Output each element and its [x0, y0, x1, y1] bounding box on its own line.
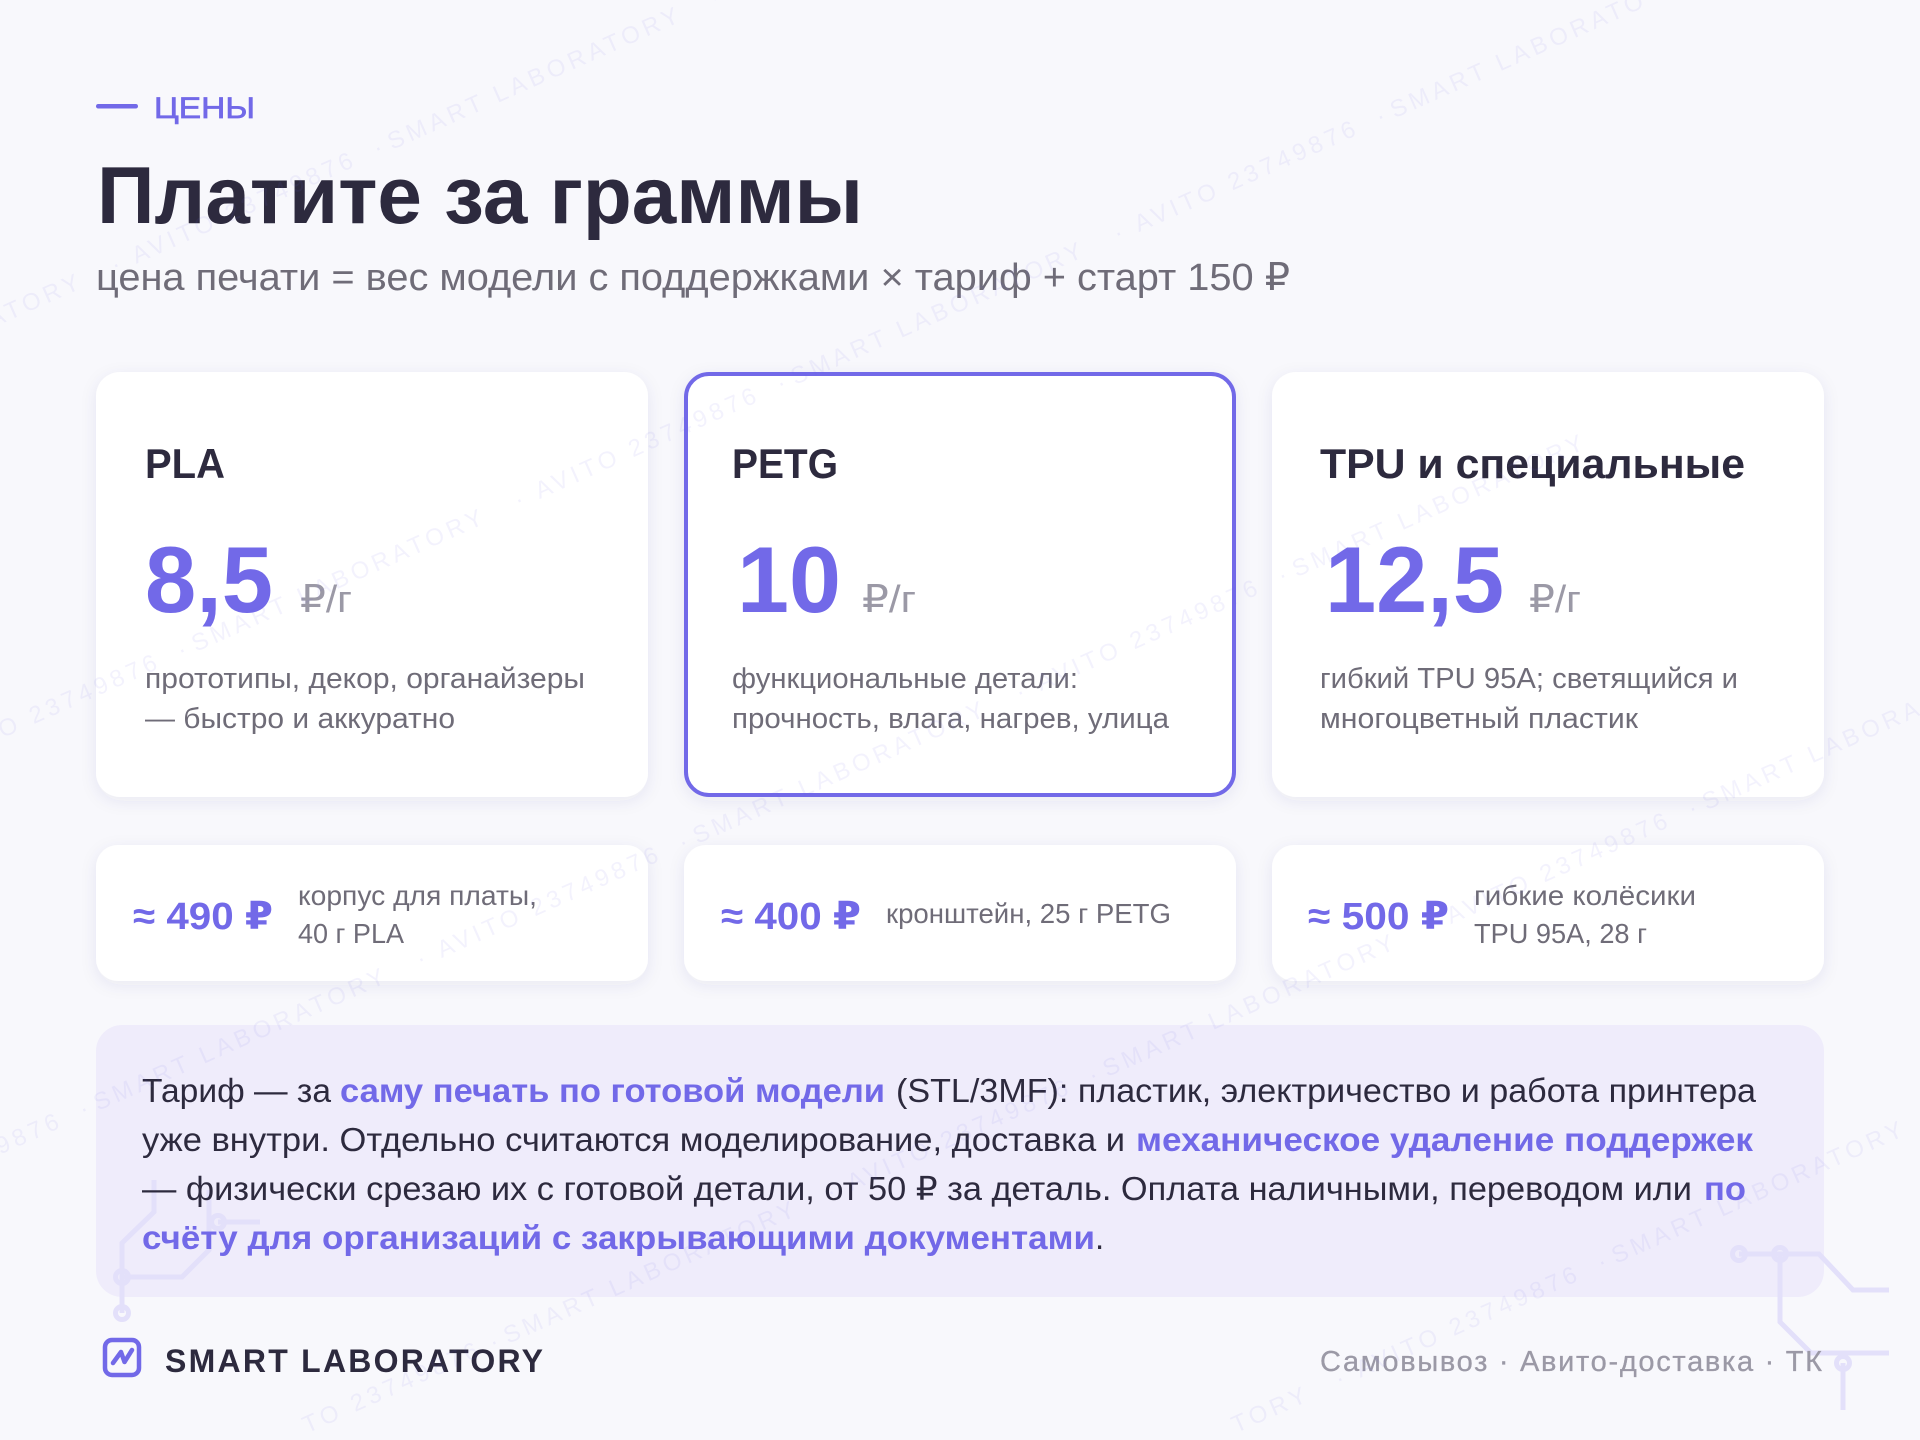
- watermark: SMART LABORATORY: [187, 503, 491, 657]
- panel: PLA card: [96, 372, 648, 797]
- watermark: TO 23749876: [298, 1336, 486, 1439]
- example description: [1474, 880, 1696, 949]
- watermark: ·: [674, 827, 696, 856]
- tariff note text: счёту для организаций с закрывающими документами: [142, 1219, 1095, 1256]
- watermark: ·: [369, 132, 391, 162]
- TPU price: 12,5: [1325, 527, 1504, 632]
- watermark: ·: [1421, 909, 1443, 939]
- watermark: ·: [485, 1326, 507, 1356]
- brand name: SMART LABORATORY: [165, 1343, 543, 1379]
- panel: PETG card (highlighted): [686, 374, 1234, 795]
- example description: корпус для платы,: [298, 880, 537, 911]
- watermark: AVITO 23749876: [1352, 1260, 1585, 1383]
- watermark: AVITO 23749876: [843, 1073, 1076, 1197]
- tariff note text: по: [1704, 1170, 1746, 1207]
- watermark: ·: [1331, 1363, 1353, 1393]
- PETG description: прочность, влага, нагрев, улица: [732, 703, 1170, 735]
- PLA description: прототипы, декор, органайзеры: [145, 663, 585, 695]
- PETG heading: PETG: [732, 440, 838, 487]
- PETG description: функциональные детали:: [732, 663, 1078, 695]
- watermark: AVITO 23749876: [1130, 114, 1364, 238]
- circuit decoration: left: [116, 1180, 260, 1320]
- watermark: AVITO 23749876: [531, 381, 764, 505]
- watermark: SMART LABORATORY: [787, 236, 1090, 391]
- eyebrow: ЦЕНЫ: ЦЕНЫ: [154, 92, 255, 125]
- tariff note text: механическое удаление поддержек: [1136, 1121, 1754, 1158]
- watermark: SMART LABORATORY: [1288, 428, 1591, 583]
- subtitle: price formula: цена печати = вес модели с поддержками × тариф + старт 150 ₽: [96, 257, 1290, 299]
- PLA description: [145, 663, 585, 735]
- tariff note text: .: [1095, 1219, 1104, 1256]
- watermark: ·: [75, 1093, 97, 1123]
- delivery options: Самовывоз · Авито-доставка · ТК: [1320, 1346, 1822, 1378]
- example price 400: ≈ 400 ₽: [721, 896, 861, 938]
- watermark: SMART LABORATORY: [689, 695, 992, 850]
- panel: TPU card: [1272, 372, 1824, 797]
- example description: кронштейн, 25 г PETG: [886, 898, 1171, 929]
- example price 500: ≈ 500 ₽: [1308, 896, 1449, 938]
- watermark: ·: [107, 249, 129, 279]
- watermark: ·: [412, 943, 434, 973]
- TPU description: [1320, 663, 1738, 735]
- watermark: SMART LABORATORY: [1607, 1115, 1911, 1269]
- circuit decoration: right: [1732, 1248, 1889, 1410]
- watermark: SMART LABORATORY: [89, 962, 393, 1116]
- PLA unit: ₽/г: [300, 579, 352, 621]
- watermark: AVITO 23749876: [1442, 806, 1676, 930]
- example description: 40 г PLA: [298, 918, 405, 949]
- watermark: ·: [1371, 101, 1394, 130]
- tariff note text: саму печать по готовой модели: [340, 1072, 885, 1109]
- watermark: ·: [1593, 1246, 1615, 1276]
- PETG unit: ₽/г: [862, 579, 916, 621]
- example card: PETG: [684, 845, 1236, 981]
- tariff note text: — физически срезаю их с готовой детали, от 50 ₽ за деталь. Оплата наличными, переводом или: [142, 1170, 1692, 1207]
- watermark: SMART LABORATORY: [1099, 928, 1402, 1083]
- watermark: ·: [1683, 793, 1706, 822]
- PETG price: 10: [737, 527, 841, 632]
- watermark: TORY: [1227, 1380, 1314, 1439]
- tariff note text: Тариф — за: [142, 1072, 332, 1109]
- watermark: AVITO 23749876: [433, 840, 666, 964]
- eyebrow: ЦЕНЫ: [96, 92, 255, 125]
- title: Платите за граммы: [97, 151, 863, 241]
- example card: PLA: [96, 845, 648, 981]
- panel: tariff note: [96, 1025, 1824, 1297]
- example card: TPU: [1272, 845, 1824, 981]
- PLA description: — быстро и аккуратно: [145, 703, 455, 735]
- PLA price: 8,5: [145, 527, 273, 632]
- watermark: AVITO 23749876: [1032, 573, 1266, 697]
- TPU description: многоцветный пластик: [1320, 703, 1638, 735]
- watermark: ·: [1273, 560, 1296, 589]
- tariff note text: уже внутри. Отдельно считаются моделирование, доставка и: [142, 1121, 1125, 1158]
- icon: logo: [105, 1340, 139, 1375]
- watermark: ·: [1084, 1060, 1106, 1089]
- example description: [298, 880, 537, 949]
- PETG description: [732, 663, 1170, 735]
- watermark: ·: [772, 368, 794, 397]
- example description: гибкие колёсики: [1474, 880, 1696, 911]
- tariff note text: [142, 1072, 1757, 1256]
- PLA heading: PLA: [145, 440, 225, 487]
- watermark: ·: [1109, 217, 1131, 247]
- TPU description: гибкий TPU 95A; светящийся и: [1320, 663, 1738, 695]
- watermark: ·: [822, 1176, 844, 1206]
- tariff note text: (STL/3MF): пластик, электричество и работа принтера: [896, 1072, 1757, 1109]
- watermark: SMART LABORATORY: [499, 1195, 803, 1349]
- watermark: ·: [510, 484, 532, 514]
- watermark: ·: [1011, 676, 1033, 706]
- TPU unit: ₽/г: [1529, 579, 1581, 621]
- watermark: ·: [173, 634, 195, 664]
- TPU heading: TPU и специальные: [1320, 440, 1745, 487]
- watermark: AVITO 23749876: [128, 146, 361, 269]
- example price 490: ≈ 490 ₽: [133, 896, 273, 938]
- watermark: SMART LABORATORY: [383, 1, 687, 155]
- example description: TPU 95A, 28 г: [1474, 918, 1647, 949]
